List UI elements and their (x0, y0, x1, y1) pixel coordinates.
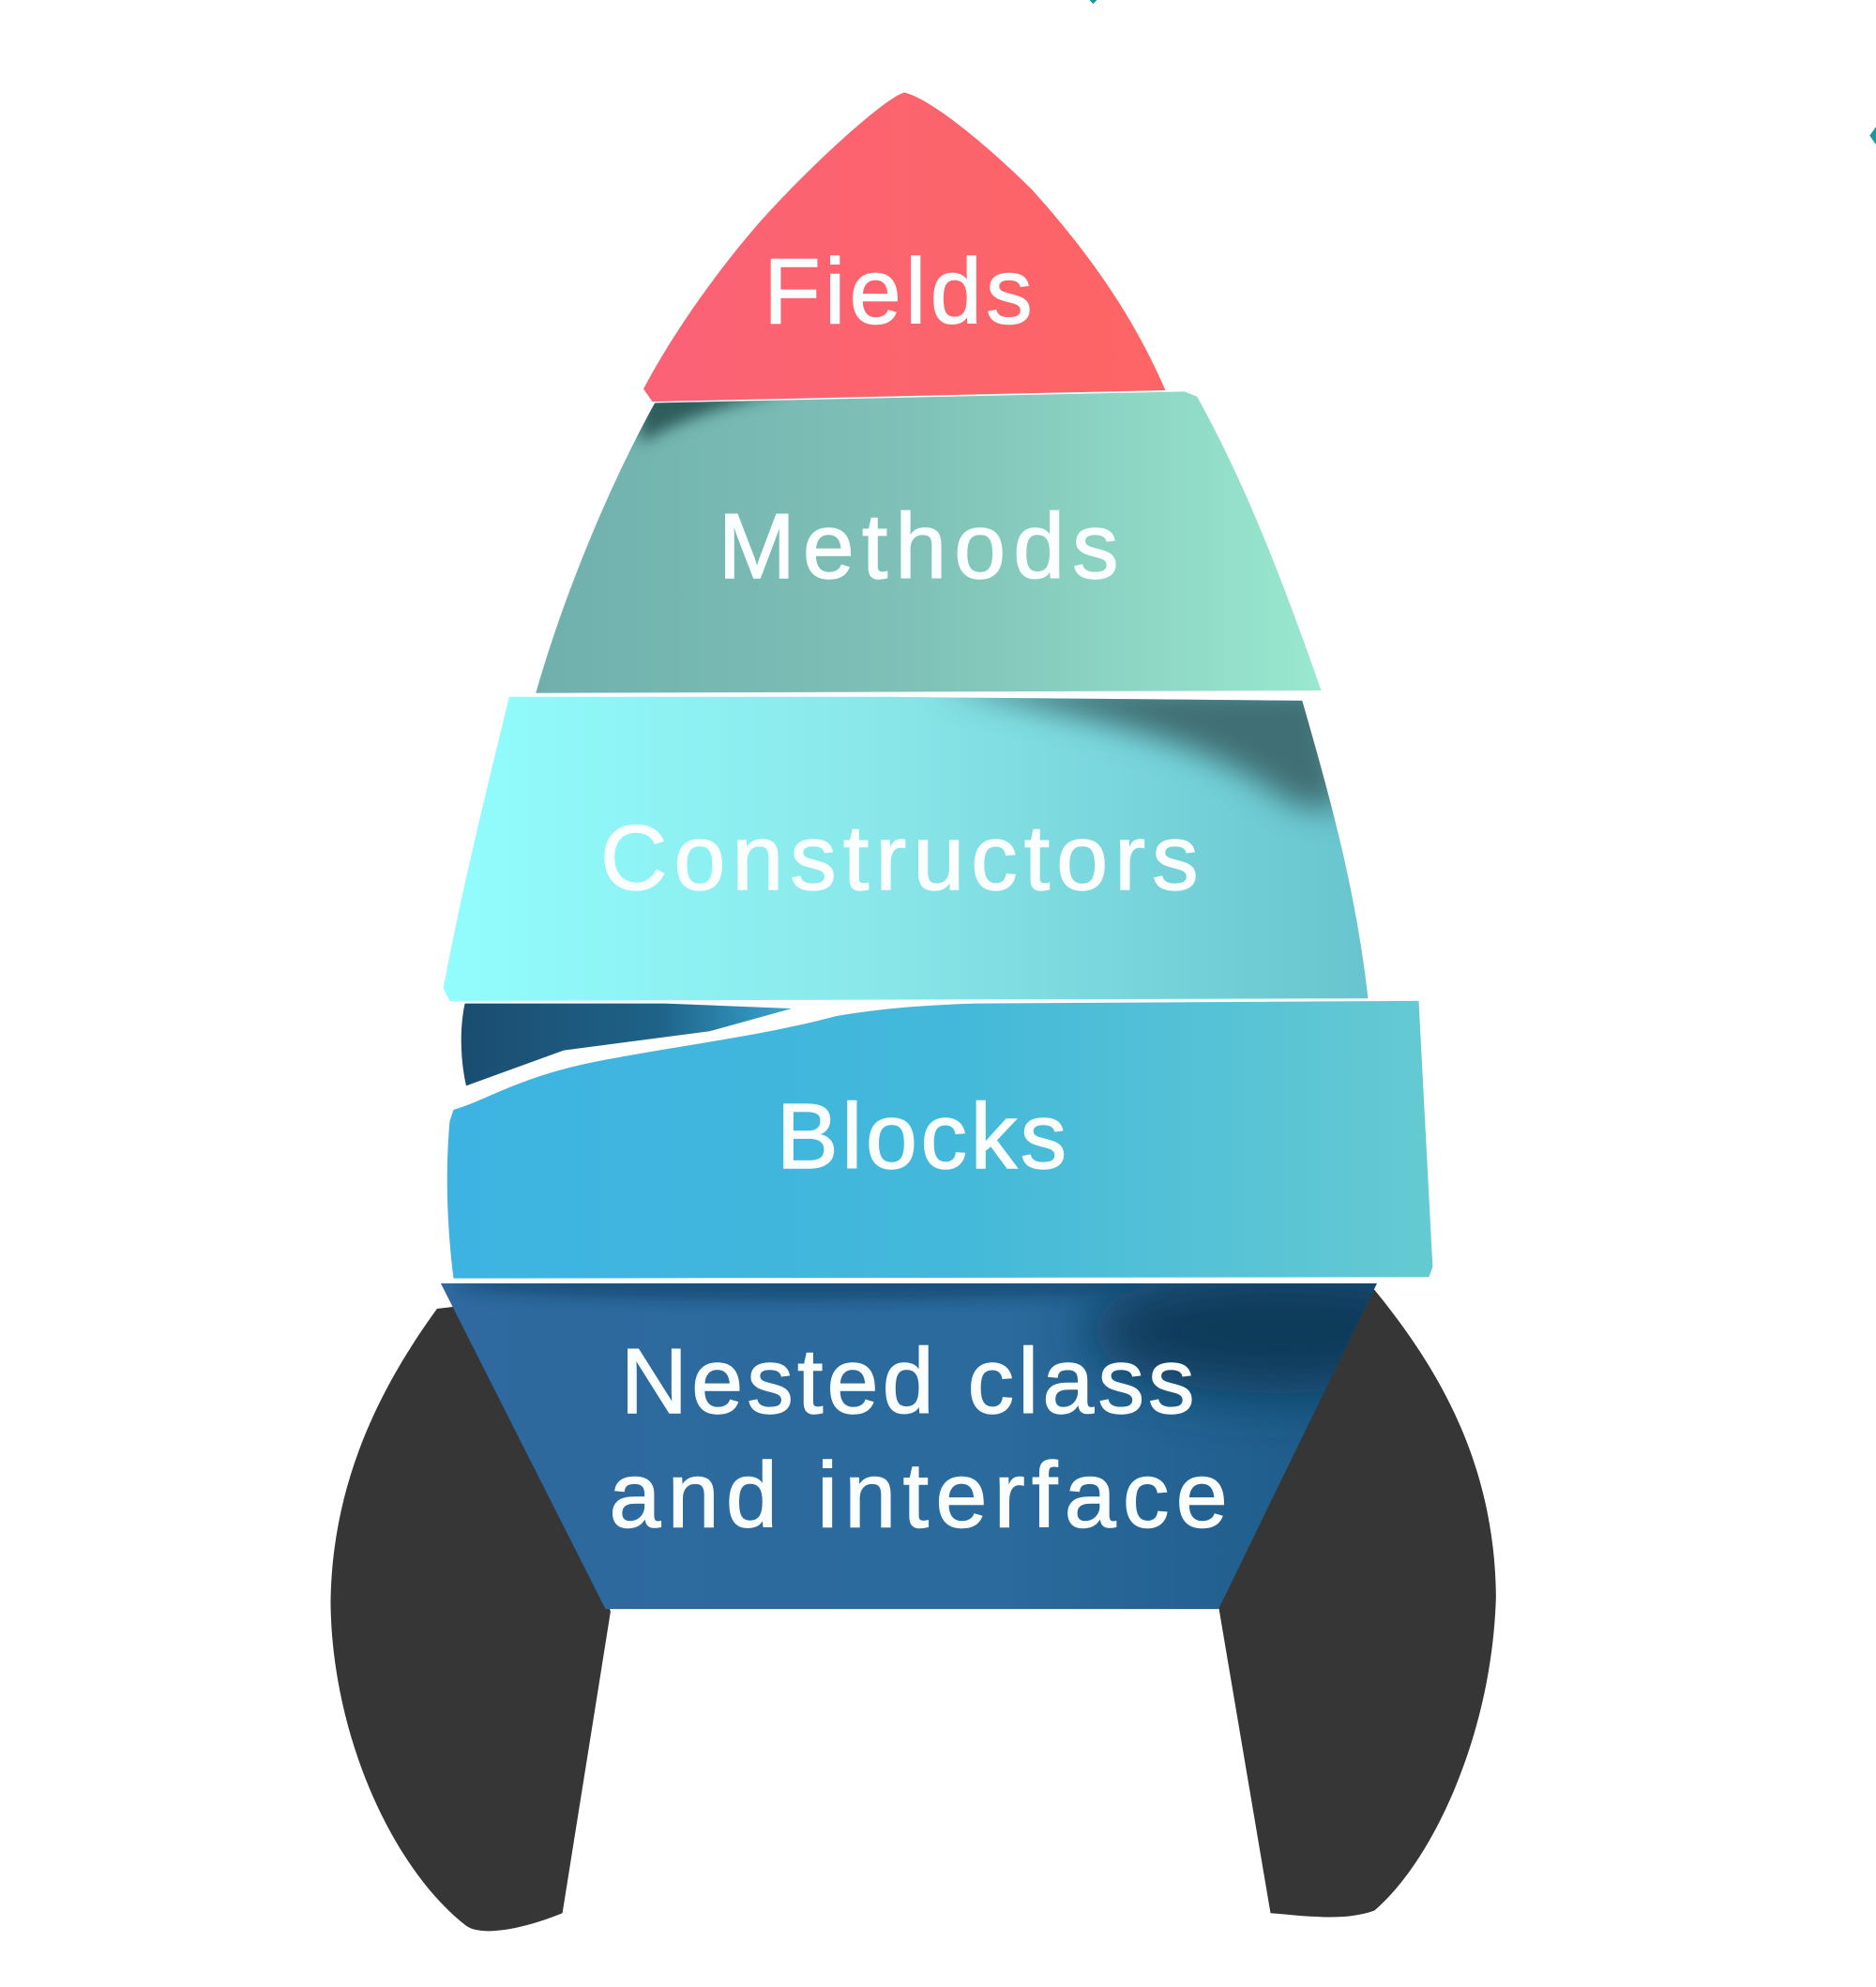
label: constructors: Constructors (600, 806, 1199, 909)
icon: right fin (1218, 1290, 1496, 1918)
panel: fields (643, 93, 1165, 402)
panel: blocks (447, 1001, 1432, 1279)
panel: methods (536, 387, 1322, 693)
panel: nested class and interface (441, 1283, 1377, 1610)
label: fields: Fields (764, 239, 1033, 342)
dark shadow behind blocks (461, 1004, 792, 1085)
icon: stray teal mark right (1869, 127, 1876, 144)
label: methods: Methods (719, 494, 1118, 598)
icon: stray teal mark top (1089, 0, 1097, 4)
label: blocks: Blocks (777, 1085, 1067, 1188)
label: and interface: and interface (610, 1443, 1228, 1546)
label: nested class: Nested class (621, 1329, 1194, 1433)
panel: constructors (444, 684, 1368, 1001)
icon: left fin (330, 1305, 611, 1931)
